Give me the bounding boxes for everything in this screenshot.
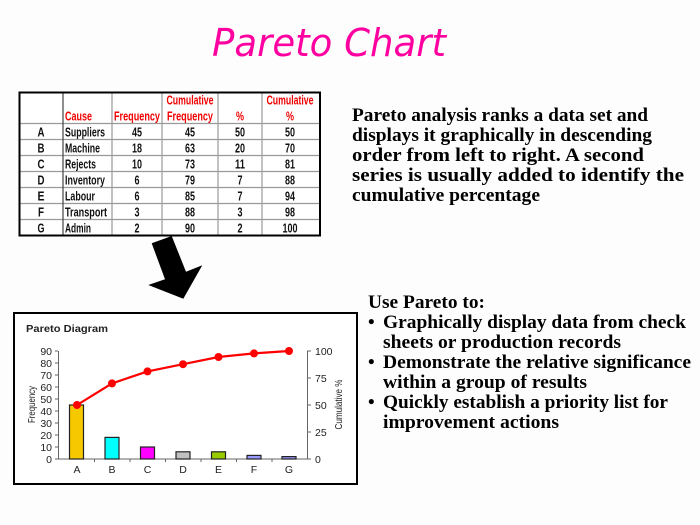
table rows: Inventory (65, 172, 106, 188)
table rows: G (38, 220, 44, 236)
right axis labels (315, 346, 333, 466)
table rows (38, 124, 298, 236)
usage list: • (368, 352, 375, 373)
left axis labels: 60 (40, 382, 52, 394)
usage list: Quickly establish a priority list for (383, 392, 669, 413)
table rows: 2 (134, 220, 140, 236)
table header: Cause (65, 108, 92, 124)
chart title: Pareto Diagram (26, 323, 108, 335)
right axis labels: 75 (315, 373, 327, 385)
left axis labels: 90 (40, 346, 52, 358)
category labels (73, 464, 293, 476)
table header: % (236, 108, 244, 124)
right axis labels: 25 (315, 427, 327, 439)
table rows: Rejects (65, 156, 96, 172)
left axis labels: 20 (40, 430, 52, 442)
table rows: 7 (238, 172, 242, 188)
left axis labels: 50 (40, 394, 52, 406)
table rows: 88 (185, 204, 195, 220)
table rows: 90 (185, 220, 195, 236)
table rows: E (38, 188, 45, 204)
table rows: 2 (238, 220, 242, 236)
usage list: • (368, 392, 375, 413)
description text: cumulative percentage (352, 185, 540, 206)
description text: order from left to right. A second (352, 145, 644, 166)
table rows: 50 (235, 124, 245, 140)
right axis labels: 0 (315, 454, 321, 466)
axis titles (26, 380, 345, 430)
table header: Frequency (167, 108, 214, 124)
left axis labels (40, 346, 52, 466)
table rows: 45 (185, 124, 195, 140)
cumulative line (73, 347, 293, 409)
table rows: Machine (65, 140, 100, 156)
table rows: B (38, 140, 44, 156)
table rows: 7 (238, 188, 242, 204)
table rows: Suppliers (65, 124, 105, 140)
description text (352, 105, 684, 206)
usage list: • (368, 312, 375, 333)
left axis labels: 80 (40, 358, 52, 370)
table rows: 98 (285, 204, 295, 220)
data table (19, 92, 320, 236)
category labels: F (251, 464, 257, 476)
table rows: C (38, 156, 45, 172)
table rows: F (38, 204, 44, 220)
left axis labels: 10 (40, 442, 52, 454)
table header: % (286, 108, 294, 124)
table rows: 20 (235, 140, 245, 156)
left axis labels: 40 (40, 406, 52, 418)
usage list: Graphically display data from check (383, 312, 686, 333)
table rows: 50 (285, 124, 295, 140)
table rows: 11 (235, 156, 245, 172)
table rows: 3 (134, 204, 140, 220)
table rows: Labour (65, 188, 95, 204)
category labels: C (144, 464, 152, 476)
bars (70, 405, 296, 459)
category labels: D (179, 464, 187, 476)
table rows: 79 (185, 172, 195, 188)
right axis labels: 50 (315, 400, 327, 412)
table rows: 70 (285, 140, 295, 156)
description text: Pareto analysis ranks a data set and (352, 105, 648, 126)
table header: Cumulative (266, 92, 314, 108)
left axis labels: 0 (46, 454, 52, 466)
axis titles: Cumulative % (333, 380, 345, 430)
table rows: 6 (134, 172, 140, 188)
table rows: Admin (65, 220, 91, 236)
table rows: 81 (285, 156, 295, 172)
table rows: 85 (185, 188, 195, 204)
table rows: 88 (285, 172, 295, 188)
table rows: Transport (65, 204, 107, 220)
table rows: 3 (238, 204, 242, 220)
category labels: A (73, 464, 81, 476)
arrow (148, 236, 202, 299)
table rows: 94 (285, 188, 296, 204)
title: Pareto Chart (212, 21, 448, 65)
usage list: Use Pareto to: (368, 292, 485, 313)
table rows: 45 (132, 124, 142, 140)
table rows: 63 (185, 140, 195, 156)
category labels: B (108, 464, 116, 476)
chart panel (14, 313, 357, 484)
table header (65, 92, 314, 124)
axes (55, 351, 311, 462)
table rows: 18 (132, 140, 142, 156)
table rows: 100 (282, 220, 298, 236)
usage list: sheets or production records (383, 332, 621, 353)
axis titles: Frequency (26, 385, 38, 423)
usage list: within a group of results (383, 372, 587, 393)
table rows: A (38, 124, 45, 140)
category labels: G (285, 464, 293, 476)
usage list: Demonstrate the relative significance (383, 352, 691, 373)
table rows: D (38, 172, 44, 188)
table header: Cumulative (166, 92, 214, 108)
table rows: 73 (185, 156, 195, 172)
usage list (368, 292, 691, 433)
usage list: improvement actions (383, 412, 559, 433)
category labels: E (215, 464, 222, 476)
description text: displays it graphically in descending (352, 125, 653, 146)
table header: Frequency (114, 108, 161, 124)
left axis labels: 70 (40, 370, 52, 382)
left axis labels: 30 (40, 418, 52, 430)
table rows: 6 (134, 188, 140, 204)
description text: series is usually added to identify the (352, 165, 684, 186)
right axis labels: 100 (315, 346, 333, 358)
table rows: 10 (132, 156, 142, 172)
